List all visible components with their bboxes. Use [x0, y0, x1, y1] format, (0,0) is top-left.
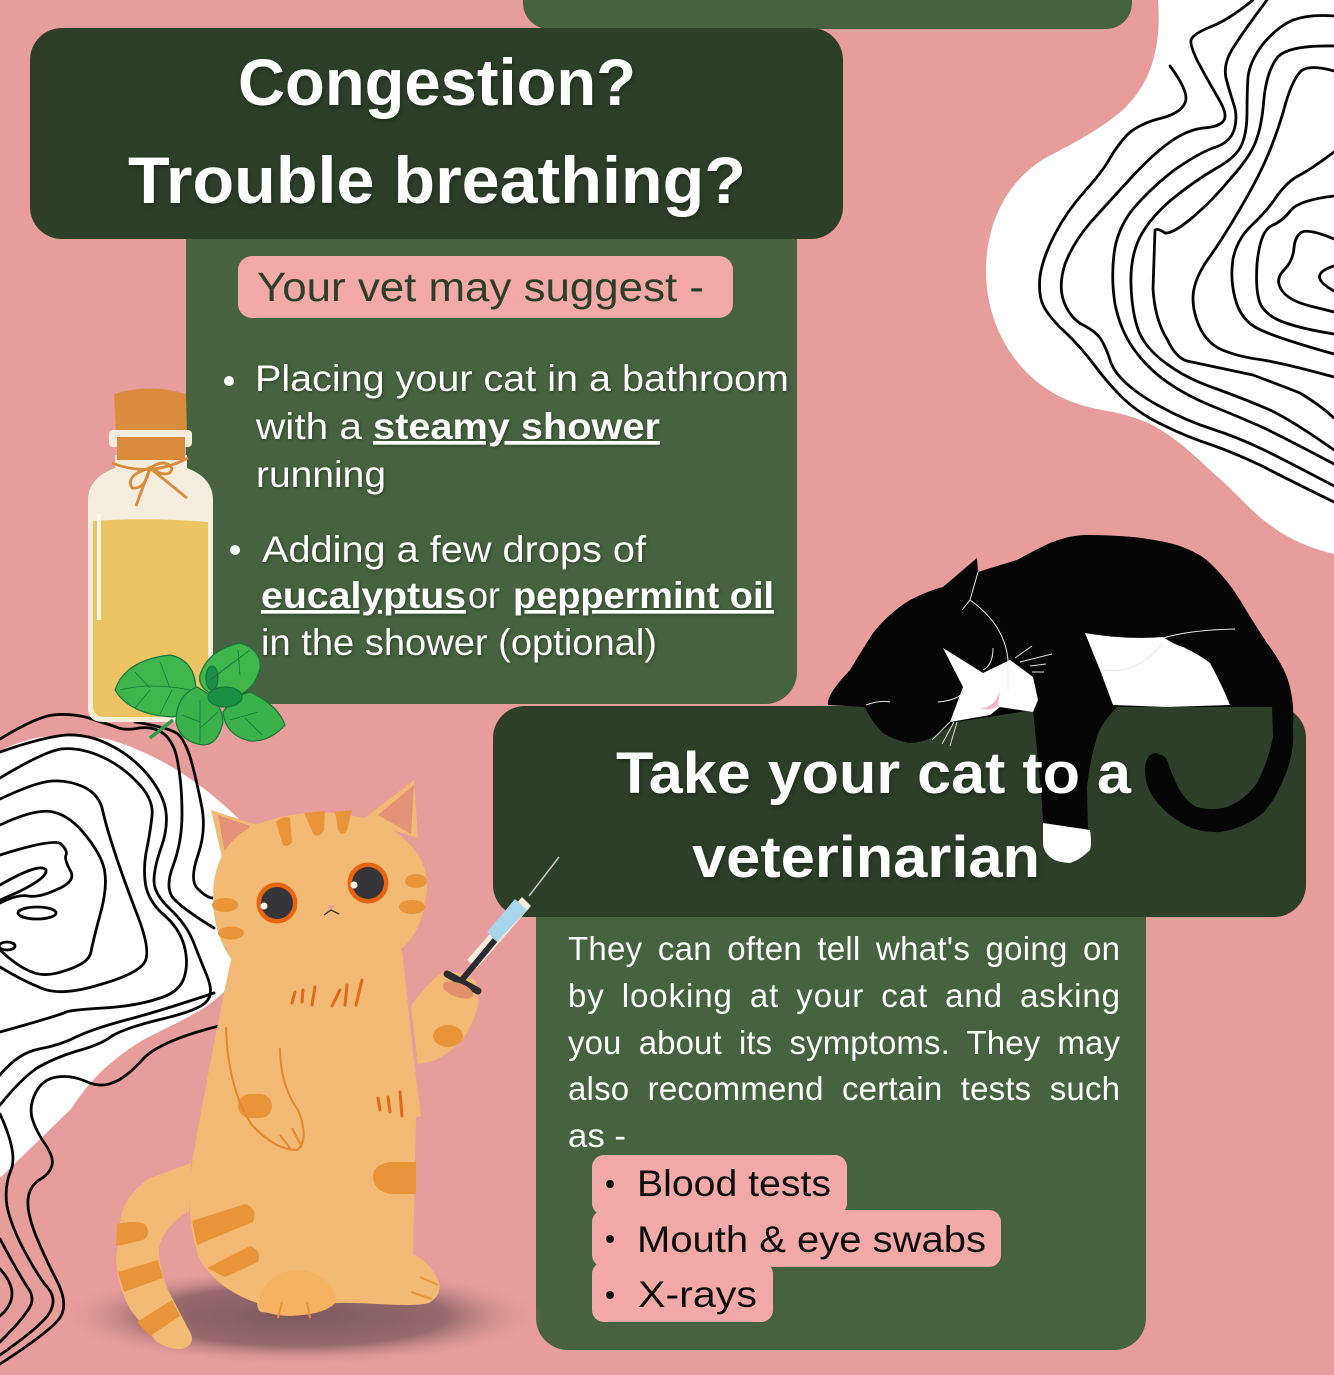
list: tests: Blood tests: [637, 1163, 831, 1204]
panel: vet suggestions: [186, 225, 797, 704]
heading: congestion: [30, 28, 843, 239]
bullet: eucalyptus or peppermint oil: or: [468, 575, 500, 616]
label: your vet may suggest: Your vet may suggest -: [257, 264, 704, 310]
body: [190, 950, 440, 1314]
syringe: [441, 857, 559, 1002]
heading text: take your cat to a veterinarian: [616, 741, 1132, 890]
text block: vet description: you about its symptoms. They may: [568, 1024, 1120, 1061]
head: [213, 812, 427, 975]
list: tests: Mouth & eye swabs: [637, 1219, 986, 1260]
shadow under cat: [55, 1266, 545, 1366]
heading: congestion: Trouble breathing?: [128, 143, 746, 217]
panel: veterinarian details: [536, 900, 1146, 1350]
white contour blob: bottom left: [0, 714, 243, 1364]
front paw: [258, 1270, 337, 1316]
list: tests: X-rays: [638, 1274, 757, 1315]
text block: vet description: They can often tell what's going on: [568, 930, 1120, 967]
list: tests: [592, 1155, 1001, 1322]
raised arm: [411, 972, 478, 1064]
bullet: steamy shower: [224, 358, 789, 495]
heading text: take your cat to a veterinarian: veterinarian: [692, 825, 1040, 890]
bullet: steamy shower: steamy shower: [373, 406, 660, 447]
heading text: take your cat to a veterinarian: Take your cat to a: [616, 741, 1132, 806]
text block: vet description: by looking at your cat and asking: [568, 977, 1120, 1014]
text block: vet description: as -: [568, 1117, 626, 1154]
text block: vet description: also recommend certain tests such: [568, 1070, 1120, 1107]
heading: congestion: Congestion?: [238, 45, 636, 119]
heading box: veterinarian: [493, 706, 1306, 917]
icon: oil bottle with cork: [88, 388, 213, 722]
bullet: eucalyptus or peppermint oil: Adding a few drops of: [262, 529, 647, 570]
icon: mint leaves: [115, 643, 285, 745]
bullet: eucalyptus or peppermint oil: peppermint oil: [513, 575, 774, 616]
bullet: eucalyptus or peppermint oil: in the shower (optional): [261, 622, 657, 663]
text block: vet description: [568, 930, 1120, 1154]
bullet: eucalyptus or peppermint oil: eucalyptus: [261, 575, 466, 616]
bullet: steamy shower: running: [256, 454, 386, 495]
illustration: sleeping black and white cat: [828, 535, 1293, 863]
illustration: orange tabby cat with syringe: [55, 780, 559, 1366]
tabby stripes: [192, 810, 463, 1277]
panel: top green strip: [523, 0, 1132, 29]
ears: [211, 810, 257, 870]
bullet: steamy shower: Placing your cat in a bathroom: [255, 358, 789, 399]
white contour blob: top right: [986, 0, 1334, 554]
fur marks and leg outline: [226, 1027, 304, 1150]
label: your vet may suggest: [238, 256, 733, 318]
eyes and face: [256, 882, 298, 924]
bullet: steamy shower: with a: [255, 406, 362, 447]
tail: [116, 1163, 192, 1349]
bullet: eucalyptus or peppermint oil: [230, 529, 774, 663]
